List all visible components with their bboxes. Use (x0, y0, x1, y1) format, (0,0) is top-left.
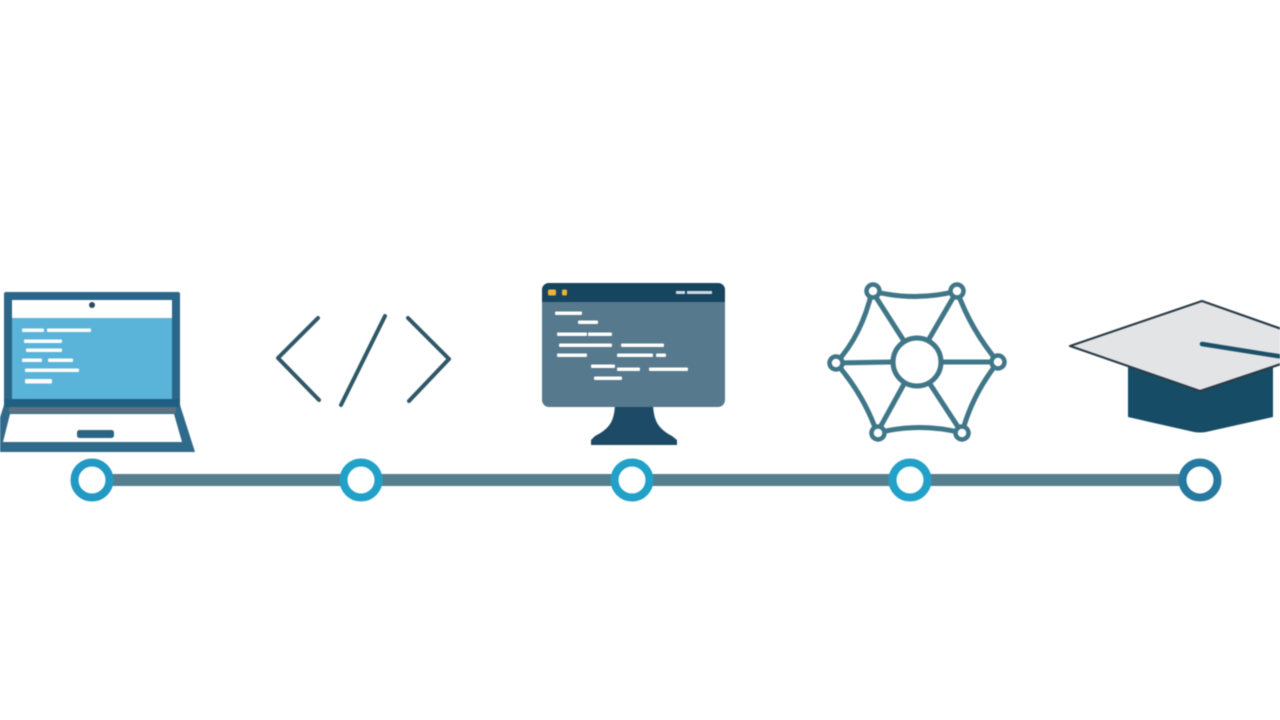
timeline bar (92, 474, 1200, 486)
monitor screen (542, 283, 725, 407)
icon: network hexagon (830, 284, 1004, 440)
milestone 4 (892, 462, 928, 498)
icon: graduation cap (1070, 301, 1280, 432)
laptop base (0, 405, 195, 452)
tassel cord (1202, 344, 1280, 358)
milestone 5 (1182, 462, 1218, 498)
cap board (1070, 301, 1280, 391)
laptop lid and screen (4, 292, 180, 407)
cap base (1128, 366, 1273, 432)
monitor stand (591, 405, 677, 445)
milestone 1 (74, 462, 110, 498)
icon: laptop (0, 292, 195, 452)
icon: desktop monitor (542, 283, 725, 445)
monitor title bar (542, 283, 725, 302)
outer curved edges (836, 291, 998, 433)
center hub (893, 338, 941, 386)
nodes (830, 284, 1004, 440)
milestone 3 (614, 462, 650, 498)
milestone 2 (344, 462, 378, 498)
icon: code brackets (278, 316, 449, 405)
monitor code lines (555, 312, 688, 380)
laptop code lines (22, 328, 91, 384)
timeline (74, 462, 1218, 498)
spokes (836, 291, 998, 433)
